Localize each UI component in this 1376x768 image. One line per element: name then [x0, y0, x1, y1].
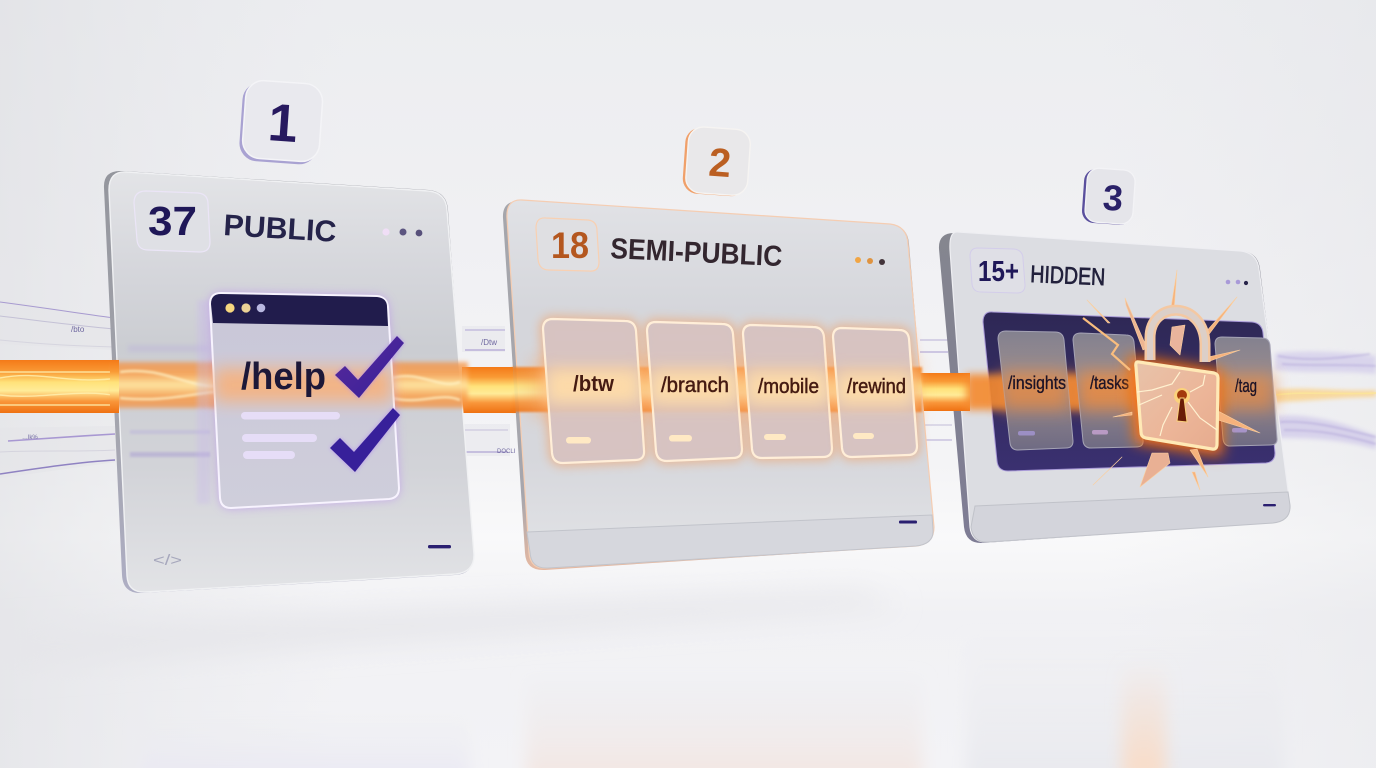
lock body — [1136, 362, 1218, 449]
card /tag — [1215, 337, 1277, 446]
stream path labels: /Dtw — [481, 338, 497, 347]
card /rewind: /rewind — [847, 376, 906, 398]
footer dash — [1263, 504, 1276, 506]
check mark top — [335, 336, 404, 398]
command cards — [543, 319, 917, 463]
stream path labels: /bto — [71, 325, 85, 334]
panel 2 glass body — [503, 200, 934, 570]
footer dash — [428, 545, 451, 548]
help window — [197, 293, 399, 508]
check mark bottom — [330, 408, 400, 472]
footer dash — [899, 520, 917, 524]
stream path labels: …lk% — [22, 435, 38, 441]
card /tasks: /tasks — [1090, 373, 1129, 393]
command label: /help: /help — [241, 356, 326, 398]
lock glow — [1134, 362, 1217, 450]
code glyph: </> — [153, 552, 182, 569]
window dots — [855, 257, 885, 265]
data stream bands and lines — [0, 300, 952, 478]
card /insights — [998, 331, 1073, 450]
number tile 15+ — [970, 248, 1025, 293]
stream path labels: DOCLI — [497, 449, 516, 455]
badge 2: 2 — [707, 141, 733, 186]
heading: hidden: HIDDEN — [1030, 261, 1106, 291]
glowing beam through panel 2 — [512, 358, 922, 418]
card /rewind — [833, 328, 917, 457]
window title bar — [211, 294, 388, 326]
sparks and shards — [1087, 270, 1260, 490]
right stream wisps — [1275, 352, 1376, 449]
panel: public — [104, 171, 474, 593]
window dots — [1226, 280, 1248, 285]
number tile 18 — [536, 218, 599, 271]
keyhole — [1174, 388, 1190, 422]
card /branch — [647, 322, 742, 461]
card /mobile: /mobile — [758, 376, 819, 398]
badge 2 — [682, 126, 751, 197]
number tile 15+: 15+ — [978, 256, 1019, 288]
stream path labels — [22, 325, 516, 455]
window dots — [382, 228, 422, 236]
blurred beam through panel 1 — [110, 345, 468, 457]
panel 1 glass body — [104, 171, 474, 593]
orange beam outside panels — [0, 360, 970, 413]
card /btw — [543, 319, 644, 463]
number tile 18: 18 — [551, 225, 589, 266]
cracks — [1137, 372, 1217, 436]
hidden cards — [998, 331, 1277, 450]
panel 3 glass body — [939, 232, 1290, 543]
dark inner tray — [983, 312, 1275, 471]
badge 3 — [1081, 167, 1136, 226]
badge 1: 1 — [266, 93, 300, 154]
card /mobile — [743, 325, 832, 458]
icon: shattered padlock — [1083, 270, 1260, 490]
card /branch: /branch — [661, 374, 729, 397]
heading: semi-public: SEMI-PUBLIC — [610, 233, 783, 273]
lightning crack — [1083, 318, 1130, 370]
text lines — [241, 412, 340, 459]
number tile 37 — [134, 191, 210, 252]
panel: semi-public — [503, 200, 934, 570]
number tile 37: 37 — [148, 198, 197, 244]
card /tasks — [1073, 333, 1143, 448]
card /btw: /btw — [573, 371, 615, 396]
card /insights: /insights — [1008, 373, 1066, 393]
badge 3: 3 — [1102, 177, 1124, 219]
card /tag: /tag — [1235, 376, 1257, 396]
shackle — [1150, 310, 1205, 362]
panel: hidden — [939, 232, 1290, 543]
heading: public: PUBLIC — [223, 209, 337, 249]
badge 1 — [238, 79, 324, 166]
title bar dots — [225, 303, 265, 313]
beam entering panel 3 — [966, 374, 1142, 410]
